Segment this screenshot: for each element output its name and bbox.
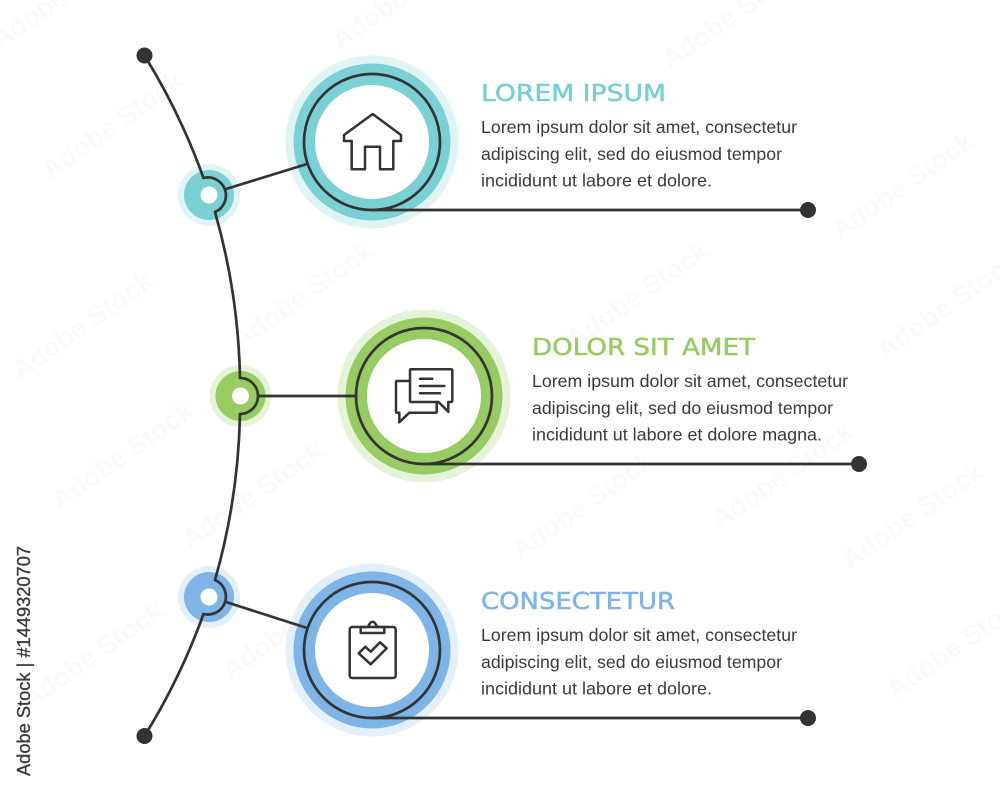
body text 2: incididunt ut labore et dolore magna. bbox=[532, 424, 822, 444]
body text 3: Lorem ipsum dolor sit amet, consectetur bbox=[481, 625, 797, 645]
body text 3 bbox=[481, 625, 797, 698]
heading: consectetur: CONSECTETUR bbox=[481, 589, 675, 615]
icon: clipboard bbox=[350, 622, 396, 678]
watermark pattern: Adobe Stock bbox=[16, 595, 169, 715]
body text 1: Lorem ipsum dolor sit amet, consectetur bbox=[481, 117, 797, 137]
watermark pattern: Adobe Stock bbox=[36, 65, 189, 185]
watermark pattern: Adobe Stock bbox=[836, 455, 989, 575]
body text 1 bbox=[481, 117, 797, 190]
watermark pattern: Adobe Stock bbox=[46, 395, 199, 515]
blue ring bbox=[286, 564, 458, 736]
vertical credit text: Adobe Stock | #1449320707 bbox=[14, 546, 34, 776]
curved timeline spine bbox=[136, 48, 258, 744]
icon: house bbox=[344, 114, 401, 169]
teal ring bbox=[286, 56, 458, 228]
green ring bbox=[338, 310, 510, 482]
watermark pattern: Adobe Stock bbox=[226, 235, 379, 355]
step 2 bbox=[258, 310, 867, 482]
watermark pattern: Adobe Stock bbox=[706, 415, 859, 535]
body text 2: adipiscing elit, sed do eiusmod tempor bbox=[532, 398, 833, 418]
connector 1 bbox=[226, 164, 307, 189]
watermark pattern: Adobe Stock bbox=[216, 565, 369, 685]
leader line 3 bbox=[372, 710, 816, 726]
connector 3 bbox=[226, 602, 307, 628]
heading: dolor sit amet: DOLOR SIT AMET bbox=[532, 335, 756, 361]
step 3 bbox=[226, 564, 816, 736]
step 1 bbox=[226, 56, 816, 228]
node: blue bbox=[178, 566, 240, 628]
leader line 2 bbox=[424, 456, 867, 472]
watermark pattern: Adobe Stock bbox=[6, 265, 159, 385]
heading: lorem ipsum: LOREM IPSUM bbox=[481, 81, 666, 107]
body text 2: Lorem ipsum dolor sit amet, consectetur bbox=[532, 371, 848, 391]
node: teal bbox=[178, 164, 240, 226]
body text 3: incididunt ut labore et dolore. bbox=[481, 678, 712, 698]
watermark pattern: Adobe Stock bbox=[506, 445, 659, 565]
body text 1: incididunt ut labore et dolore. bbox=[481, 170, 712, 190]
body text 2 bbox=[532, 371, 848, 444]
leader line 1 bbox=[372, 202, 816, 218]
watermark pattern: Adobe Stock bbox=[826, 125, 979, 245]
watermark pattern: Adobe Stock bbox=[176, 435, 329, 555]
connector 2 bbox=[258, 395, 356, 397]
body text 1: adipiscing elit, sed do eiusmod tempor bbox=[481, 144, 782, 164]
icon: chat bubbles bbox=[396, 369, 452, 422]
node: green bbox=[210, 365, 272, 427]
body text 3: adipiscing elit, sed do eiusmod tempor bbox=[481, 652, 782, 672]
watermark pattern: Adobe Stock bbox=[561, 235, 714, 355]
